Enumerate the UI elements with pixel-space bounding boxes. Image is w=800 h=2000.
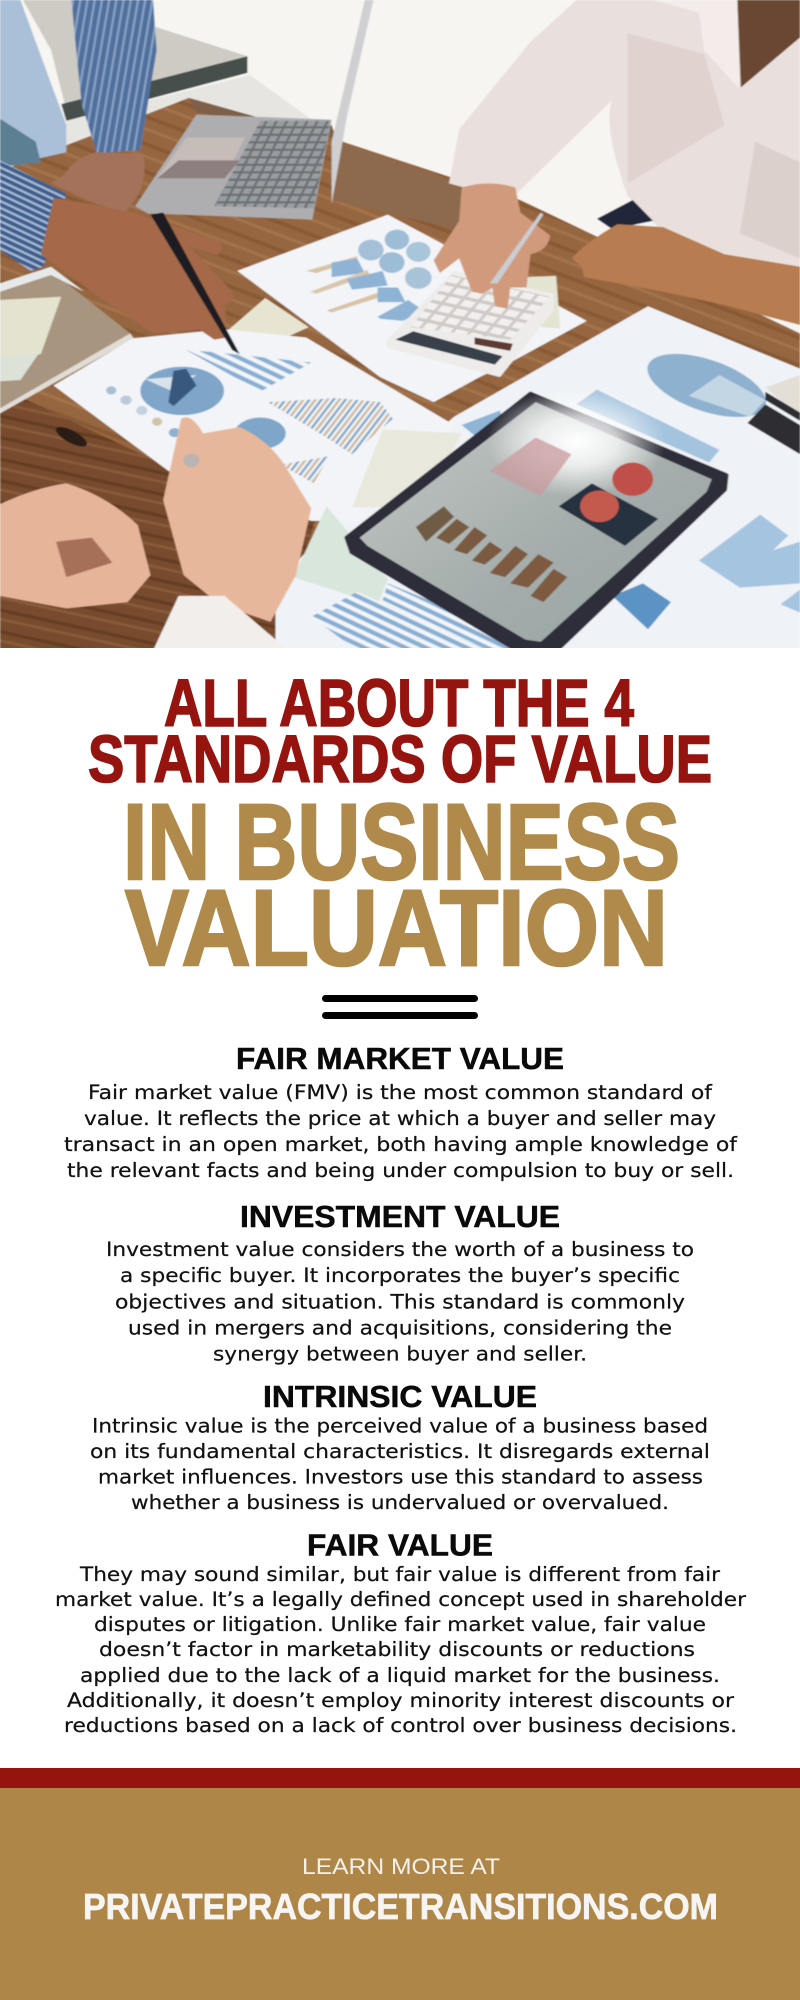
title: in business valuation: IN BUSINESS: [123, 781, 680, 902]
hero photo: business team reviewing charts on a wooden table: [0, 0, 800, 648]
section: intrinsic value: [90, 1380, 710, 1514]
tablet: [347, 388, 726, 651]
body text: doesn’t factor in marketability discounts or reductions: [99, 1638, 695, 1661]
body text: market value. It’s a legally defined concept used in shareholder: [55, 1588, 747, 1611]
person left shirt: [0, 0, 66, 160]
table: [0, 98, 800, 651]
body text: synergy between buyer and seller.: [213, 1342, 587, 1366]
notebooks: [747, 404, 800, 454]
pointing hand: [0, 160, 66, 271]
body text: applied due to the lack of a liquid market for the business.: [80, 1664, 720, 1687]
body text: [90, 1414, 710, 1514]
body text: value. It reflects the price at which a buyer and seller may: [84, 1107, 716, 1130]
notebook left: [0, 271, 130, 410]
heading: INVESTMENT VALUE: [240, 1200, 560, 1234]
body text: market influences. Investors use this standard to assess: [98, 1466, 703, 1488]
footer: website url: PRIVATEPRACTICETRANSITIONS.COM: [83, 1886, 718, 1927]
body text: [106, 1238, 694, 1366]
right person: [449, 0, 800, 267]
section: fair value: [55, 1528, 747, 1737]
bottom hands: [163, 417, 311, 622]
body text: disputes or litigation. Unlike fair market value, fair value: [94, 1613, 706, 1636]
paper C: [276, 306, 800, 651]
body text: a specific buyer. It incorporates the buyer’s specific: [120, 1264, 680, 1287]
paper A: [237, 215, 587, 402]
title: all about the 4 standards of value: [88, 666, 712, 797]
footer: learn more at: LEARN MORE AT: [302, 1854, 500, 1879]
heading: FAIR MARKET VALUE: [236, 1042, 564, 1076]
right hand: [571, 224, 800, 325]
laptop: [135, 0, 373, 220]
sticky under pen: [224, 298, 309, 356]
title: in business valuation: [123, 781, 680, 988]
body text: used in mergers and acquisitions, considering the: [128, 1316, 672, 1340]
section: fair market value: [64, 1042, 738, 1182]
body text: the relevant facts and being under compulsion to buy or sell.: [67, 1159, 734, 1182]
body text: on its fundamental characteristics. It disregards external: [90, 1440, 710, 1463]
body text: Investment value considers the worth of a business to: [106, 1238, 694, 1261]
body text: Intrinsic value is the perceived value of a business based: [92, 1414, 708, 1438]
footer panel: [0, 1788, 800, 2000]
heading: INTRINSIC VALUE: [263, 1380, 537, 1414]
body text: Additionally, it doesn’t employ minority interest discounts or: [67, 1689, 735, 1712]
body text: transact in an open market, both having ample knowledge of: [64, 1133, 738, 1156]
body text: Fair market value (FMV) is the most common standard of: [88, 1081, 713, 1104]
heading: FAIR VALUE: [307, 1528, 493, 1562]
body text: objectives and situation. This standard is commonly: [115, 1290, 685, 1314]
body text: They may sound similar, but fair value is different from fair: [79, 1563, 721, 1586]
title: all about the 4 standards of value: ALL ABOUT THE 4: [164, 666, 634, 741]
bottom blue bars: [311, 515, 800, 651]
market share pie: [636, 341, 777, 430]
red band: [0, 1768, 800, 1788]
section: investment value: [106, 1200, 694, 1366]
body text: [64, 1081, 738, 1182]
middle hand on calculator: [434, 183, 550, 308]
title: in business valuation: VALUATION: [125, 867, 668, 988]
body text: whether a business is undervalued or overvalued.: [131, 1491, 669, 1514]
divider: double bar: [322, 995, 478, 1019]
calculator: [385, 271, 554, 377]
paper B: [54, 329, 454, 521]
body text: [55, 1563, 747, 1737]
body text: reductions based on a lack of control over business decisions.: [64, 1714, 737, 1737]
